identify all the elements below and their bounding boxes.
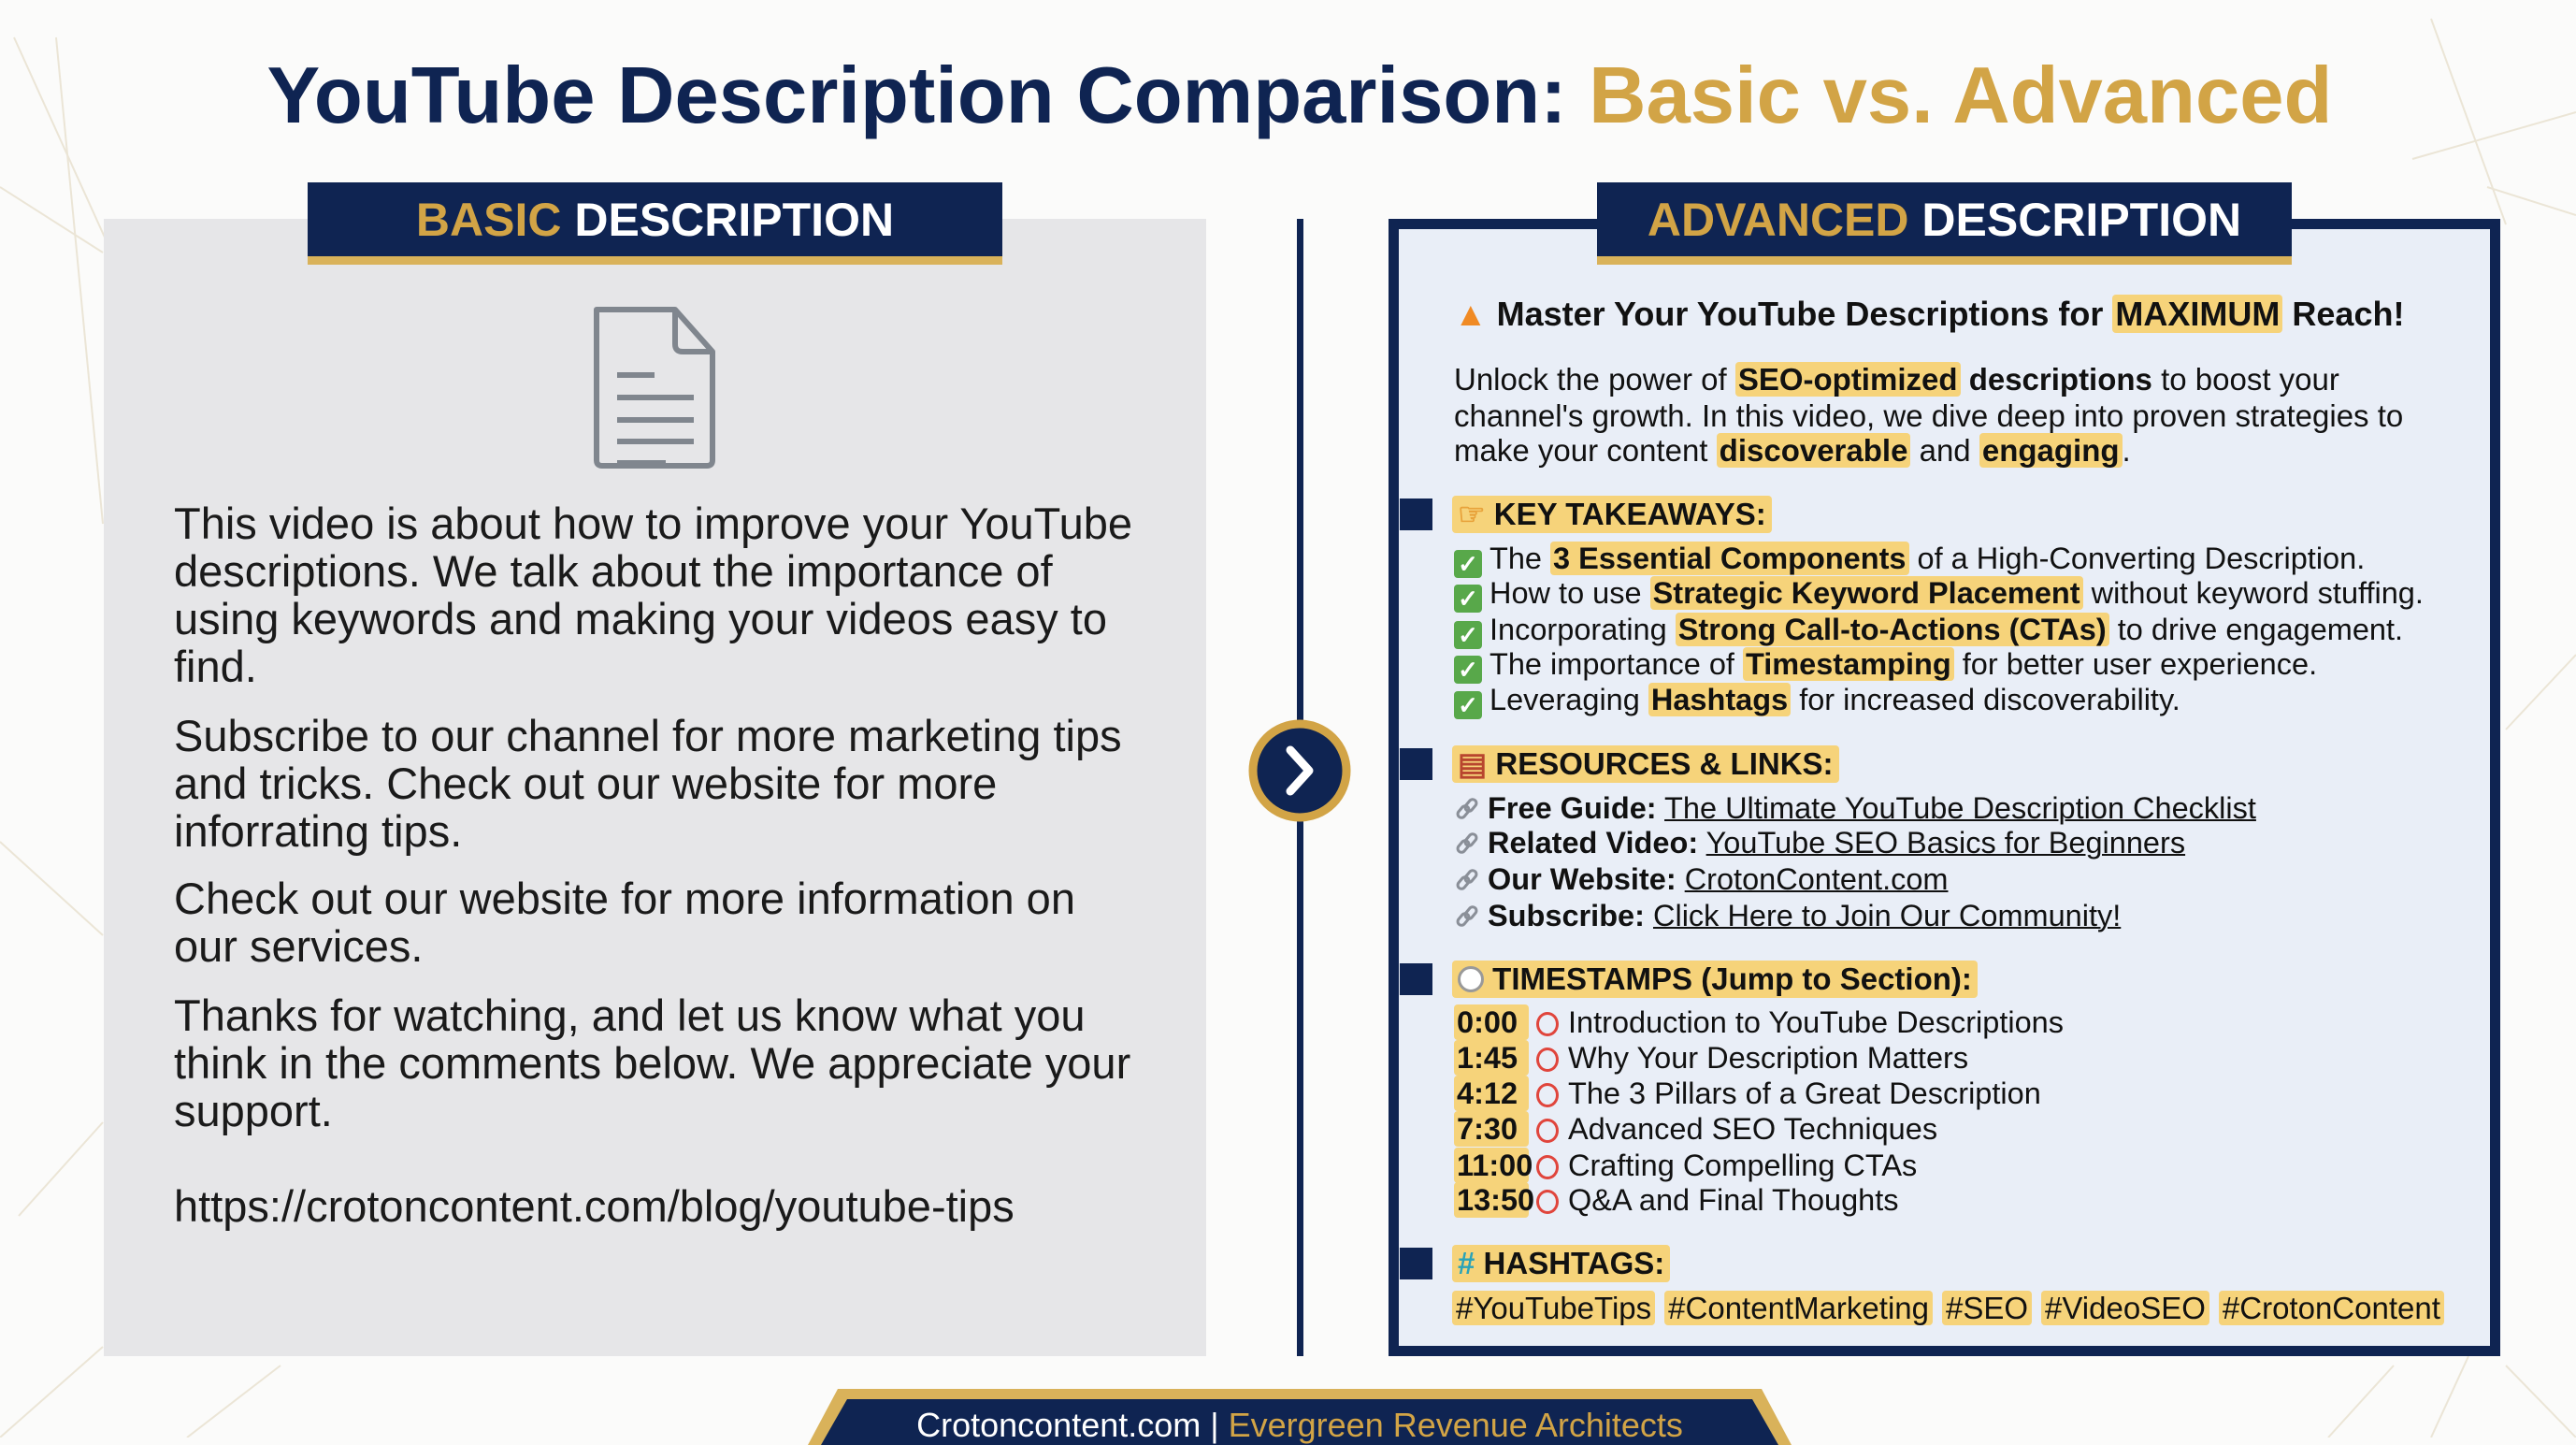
text: Incorporating Strong Call-to-Actions (CTAs) to drive engagement. <box>1489 613 2403 646</box>
text: find. <box>174 642 257 691</box>
text: ✓ <box>1458 691 1478 719</box>
text: ✓ <box>1458 621 1478 649</box>
text: inforrating tips. <box>174 806 462 856</box>
icon: document <box>594 307 715 469</box>
text: Q&A and Final Thoughts <box>1568 1183 1899 1217</box>
text: 7:30 <box>1457 1112 1518 1146</box>
text: ✓ <box>1458 550 1478 578</box>
title: YouTube Description Comparison: Basic vs. Advanced <box>267 51 2332 140</box>
text: The 3 Pillars of a Great Description <box>1568 1077 2041 1110</box>
text: https://crotoncontent.com/blog/youtube-tips <box>174 1181 1015 1231</box>
text: Advanced SEO Techniques <box>1568 1112 1937 1146</box>
text: Why Your Description Matters <box>1568 1041 1968 1075</box>
text: ✓ <box>1458 656 1478 684</box>
text: 4:12 <box>1457 1077 1518 1110</box>
text: Free Guide: The Ultimate YouTube Description Checklist <box>1488 791 2256 825</box>
text: our services. <box>174 921 423 971</box>
section: key takeaways: ☞ KEY TAKEAWAYS: <box>1458 497 1766 531</box>
text: Leveraging Hashtags for increased discoverability. <box>1489 683 2180 716</box>
text: descriptions. We talk about the importance of <box>174 546 1053 596</box>
text: The importance of Timestamping for better user experience. <box>1489 647 2317 681</box>
section: timestamps: TIMESTAMPS (Jump to Section): <box>1492 961 1972 996</box>
text: Thanks for watching, and let us know what you <box>174 990 1085 1040</box>
text: Our Website: CrotonContent.com <box>1488 862 1949 896</box>
panel: advanced description <box>1389 219 2500 1356</box>
panel: basic description <box>104 219 1206 1356</box>
text: The 3 Essential Components of a High-Converting Description. <box>1489 542 2365 575</box>
text: support. <box>174 1086 333 1135</box>
heading: basic description: BASIC DESCRIPTION <box>416 194 894 246</box>
text: 1:45 <box>1457 1041 1518 1075</box>
text: Subscribe: Click Here to Join Our Community! <box>1488 899 2121 932</box>
text: think in the comments below. We appreciate your <box>174 1038 1130 1088</box>
icon: arrow circle <box>1249 720 1350 821</box>
text: ✓ <box>1458 585 1478 613</box>
footer banner <box>808 1389 1792 1445</box>
text: basic paragraphs <box>174 499 1132 1231</box>
text: Related Video: YouTube SEO Basics for Beginners <box>1488 826 2185 860</box>
text: 13:50 <box>1457 1183 1534 1217</box>
text: Subscribe to our channel for more marketing tips <box>174 711 1122 760</box>
text: channel's growth. In this video, we dive deep into proven strategies to <box>1454 398 2403 433</box>
section: hashtags: # HASHTAGS: <box>1458 1246 1664 1280</box>
text: Introduction to YouTube Descriptions <box>1568 1005 2064 1039</box>
heading: advanced description: ADVANCED DESCRIPTION <box>1648 194 2241 246</box>
intro text: Unlock the power of SEO-optimized descriptions to boost your <box>1454 362 2339 397</box>
text: Check out our website for more information on <box>174 874 1075 923</box>
text: #YouTubeTips #ContentMarketing #SEO #VideoSEO #CrotonContent <box>1456 1291 2440 1325</box>
section: resources: ▤ RESOURCES & LINKS: <box>1458 746 1834 781</box>
text: How to use Strategic Keyword Placement without keyword stuffing. <box>1489 576 2424 610</box>
heading: advanced description <box>1597 182 2292 265</box>
headline: ▲ Master Your YouTube Descriptions for MAXIMUM Reach! <box>1454 295 2404 333</box>
divider line <box>1297 219 1303 1356</box>
advanced content <box>1400 295 2444 1325</box>
text: Crafting Compelling CTAs <box>1568 1149 1917 1182</box>
text: make your content discoverable and engaging. <box>1454 433 2131 468</box>
text: This video is about how to improve your YouTube <box>174 499 1132 548</box>
text: 0:00 <box>1457 1005 1518 1039</box>
text: and tricks. Check out our website for more <box>174 759 997 808</box>
heading: basic description <box>308 182 1002 265</box>
text: using keywords and making your videos easy to <box>174 594 1107 643</box>
footer banner: Crotoncontent.com | Evergreen Revenue Architects <box>916 1406 1683 1444</box>
text: 11:00 <box>1457 1149 1533 1182</box>
